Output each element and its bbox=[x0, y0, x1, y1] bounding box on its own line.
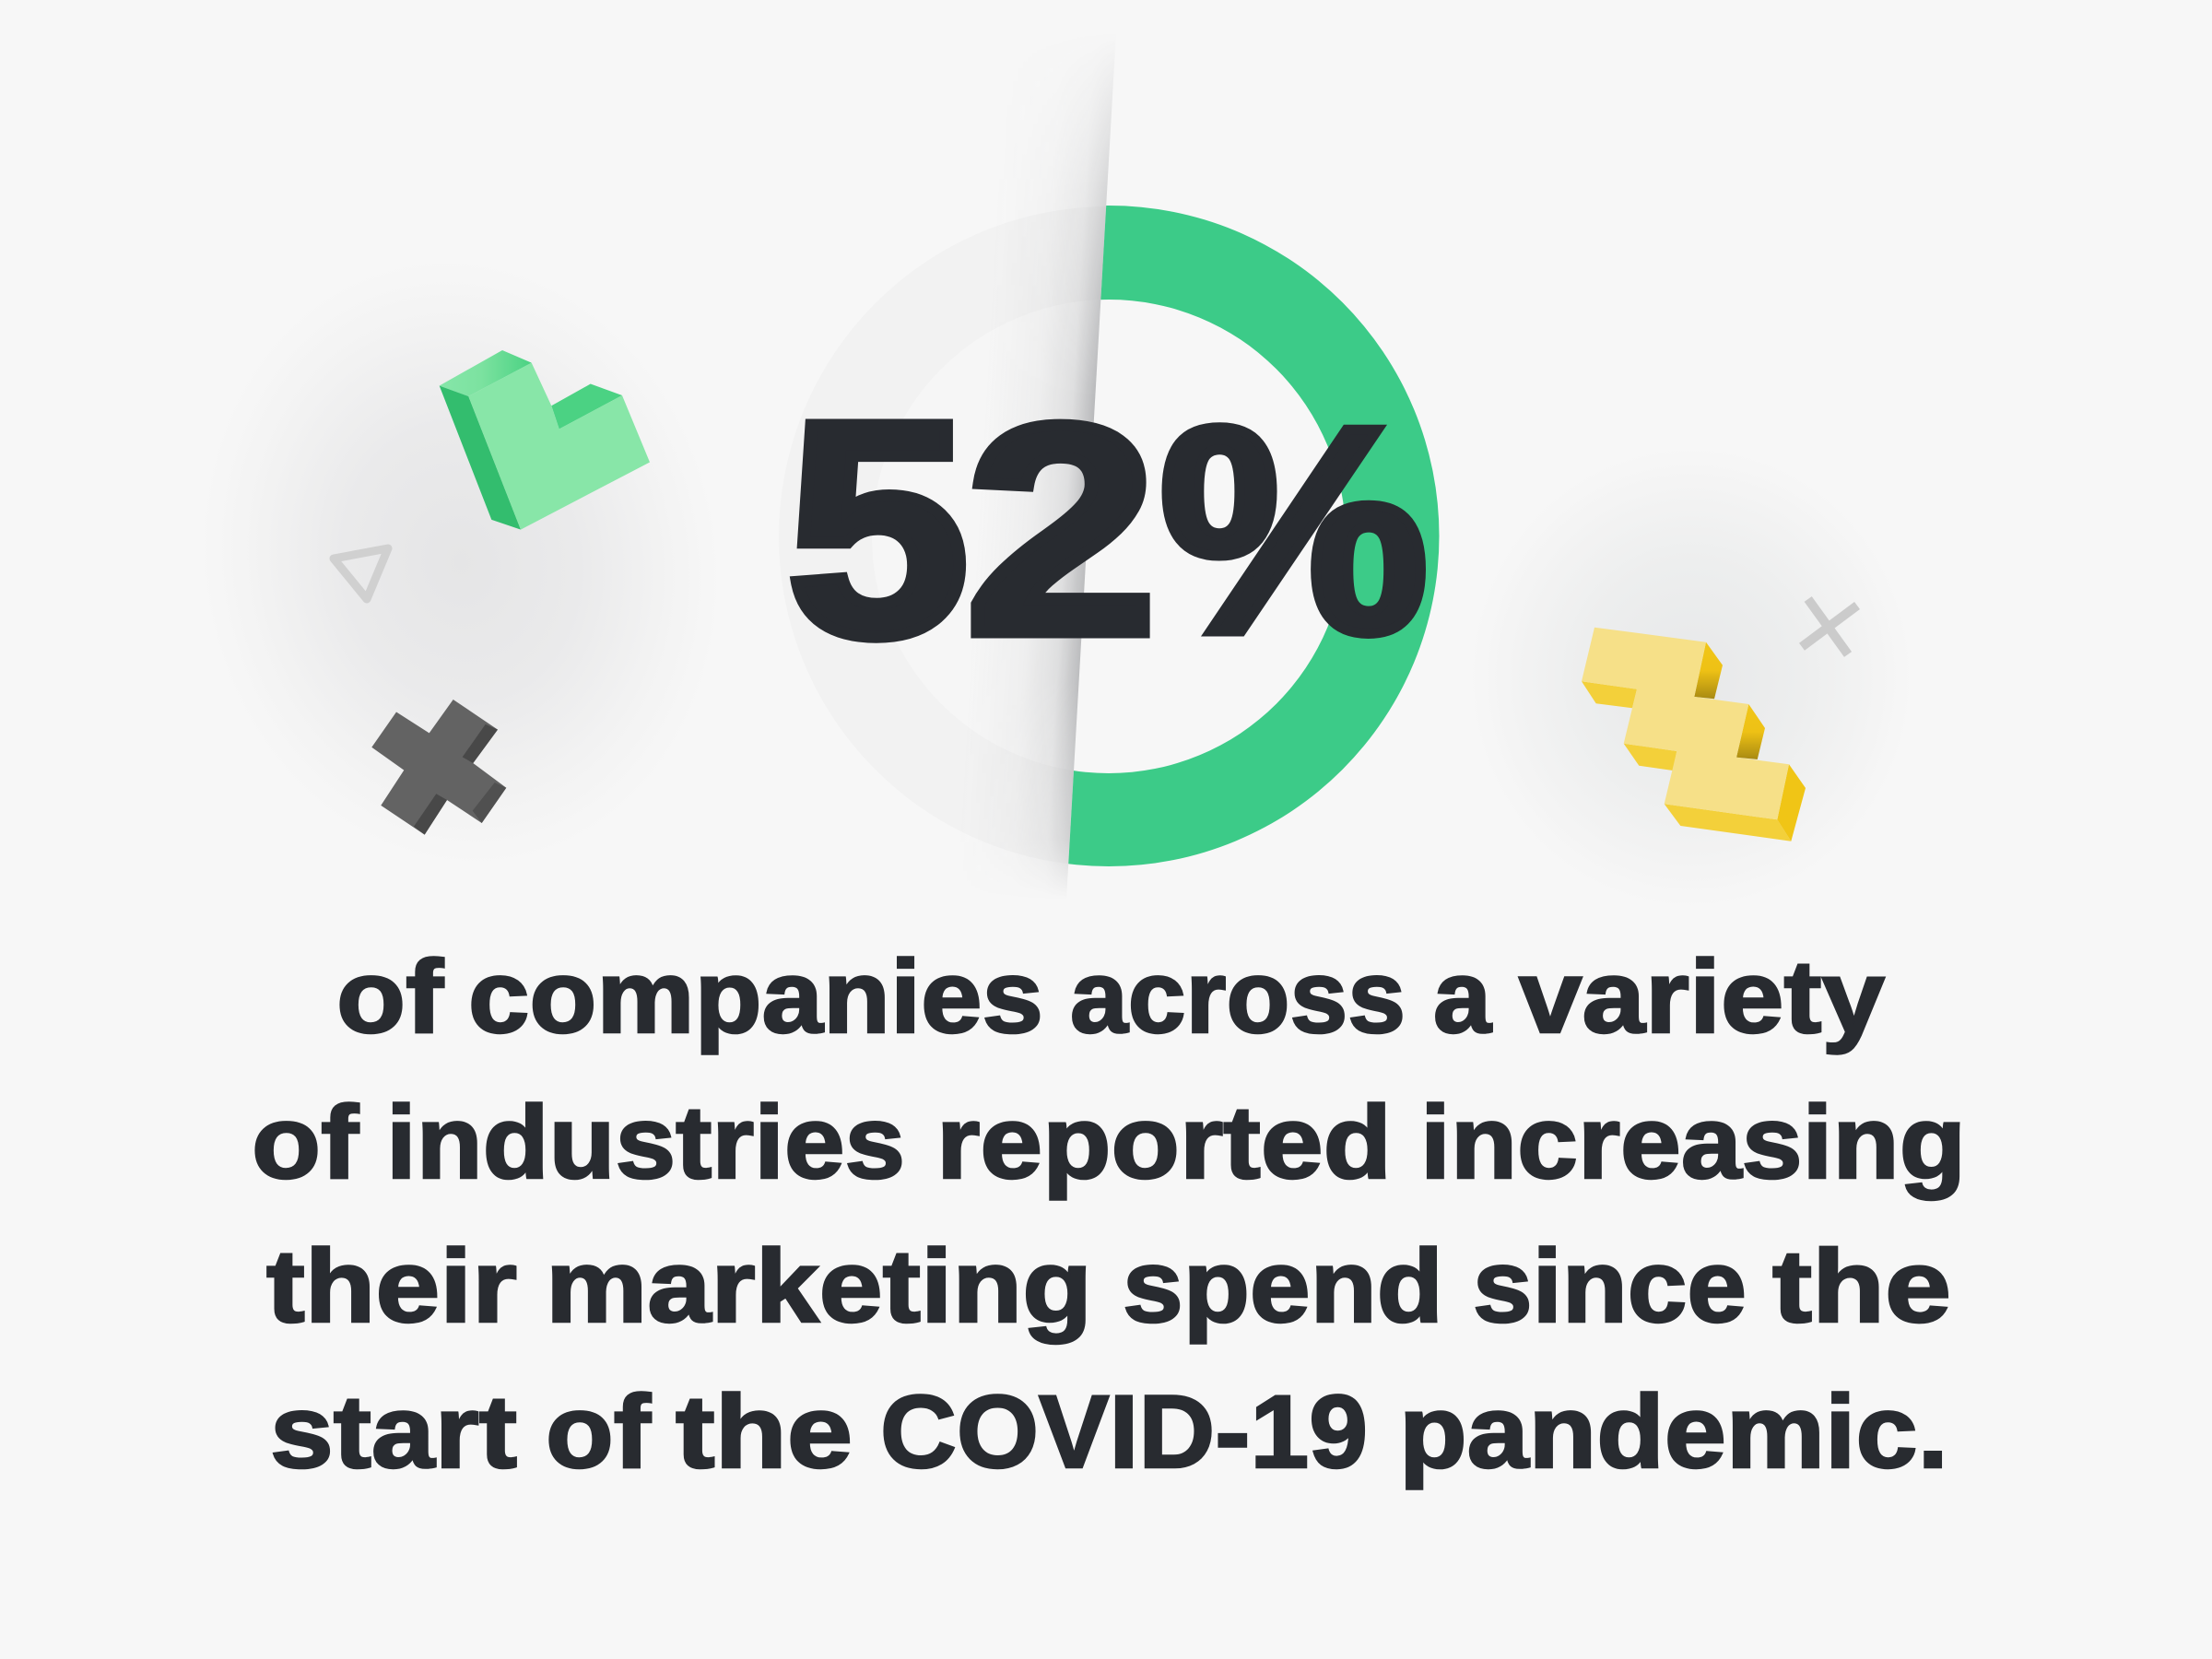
soft shadow: left shapes bbox=[154, 218, 768, 907]
description text bbox=[252, 939, 1966, 1489]
big statistic: 2 bbox=[966, 365, 1157, 696]
line 3: their bbox=[266, 1229, 517, 1344]
line 2: industries bbox=[386, 1085, 905, 1200]
line 2: increasing bbox=[1420, 1085, 1966, 1200]
line 4: COVID-19 bbox=[880, 1374, 1368, 1489]
donut: faded remainder bbox=[779, 206, 1439, 866]
line 2 bbox=[252, 1085, 1966, 1200]
line 1: variety bbox=[1519, 939, 1885, 1054]
icon: green 3D block bbox=[440, 350, 650, 530]
line 3: the bbox=[1772, 1229, 1951, 1344]
line 4 bbox=[270, 1374, 1948, 1489]
icon: grey x mark bbox=[1802, 599, 1857, 654]
line 4: start bbox=[270, 1374, 517, 1489]
line 3: spend bbox=[1123, 1229, 1443, 1344]
line 3: since bbox=[1473, 1229, 1747, 1344]
big statistic bbox=[787, 359, 1429, 699]
icon: dark grey 3D cross bbox=[371, 700, 506, 835]
line 2: reported bbox=[936, 1085, 1392, 1200]
line 1: a bbox=[1433, 939, 1492, 1054]
line 4: the bbox=[676, 1374, 853, 1489]
icon: yellow 3D staircase block bbox=[1582, 628, 1806, 841]
big statistic: 5 bbox=[787, 359, 969, 699]
line 3 bbox=[266, 1229, 1951, 1344]
line 1: companies bbox=[468, 939, 1043, 1054]
line 4: of bbox=[546, 1374, 652, 1489]
big statistic: % bbox=[1159, 367, 1429, 694]
icon: grey triangle outline bbox=[334, 548, 388, 599]
line 3: marketing bbox=[546, 1229, 1092, 1344]
line 1: of bbox=[336, 939, 444, 1054]
line 2: of bbox=[252, 1085, 359, 1200]
soft shadow: right shapes bbox=[1470, 447, 1912, 908]
donut chart: 52 percent bbox=[988, 70, 1440, 885]
fold shadow bbox=[1021, 70, 1113, 885]
donut: green segment bbox=[1068, 206, 1440, 866]
line 4: pandemic. bbox=[1399, 1374, 1948, 1489]
line 1: across bbox=[1070, 939, 1406, 1054]
line 1 bbox=[336, 939, 1885, 1054]
